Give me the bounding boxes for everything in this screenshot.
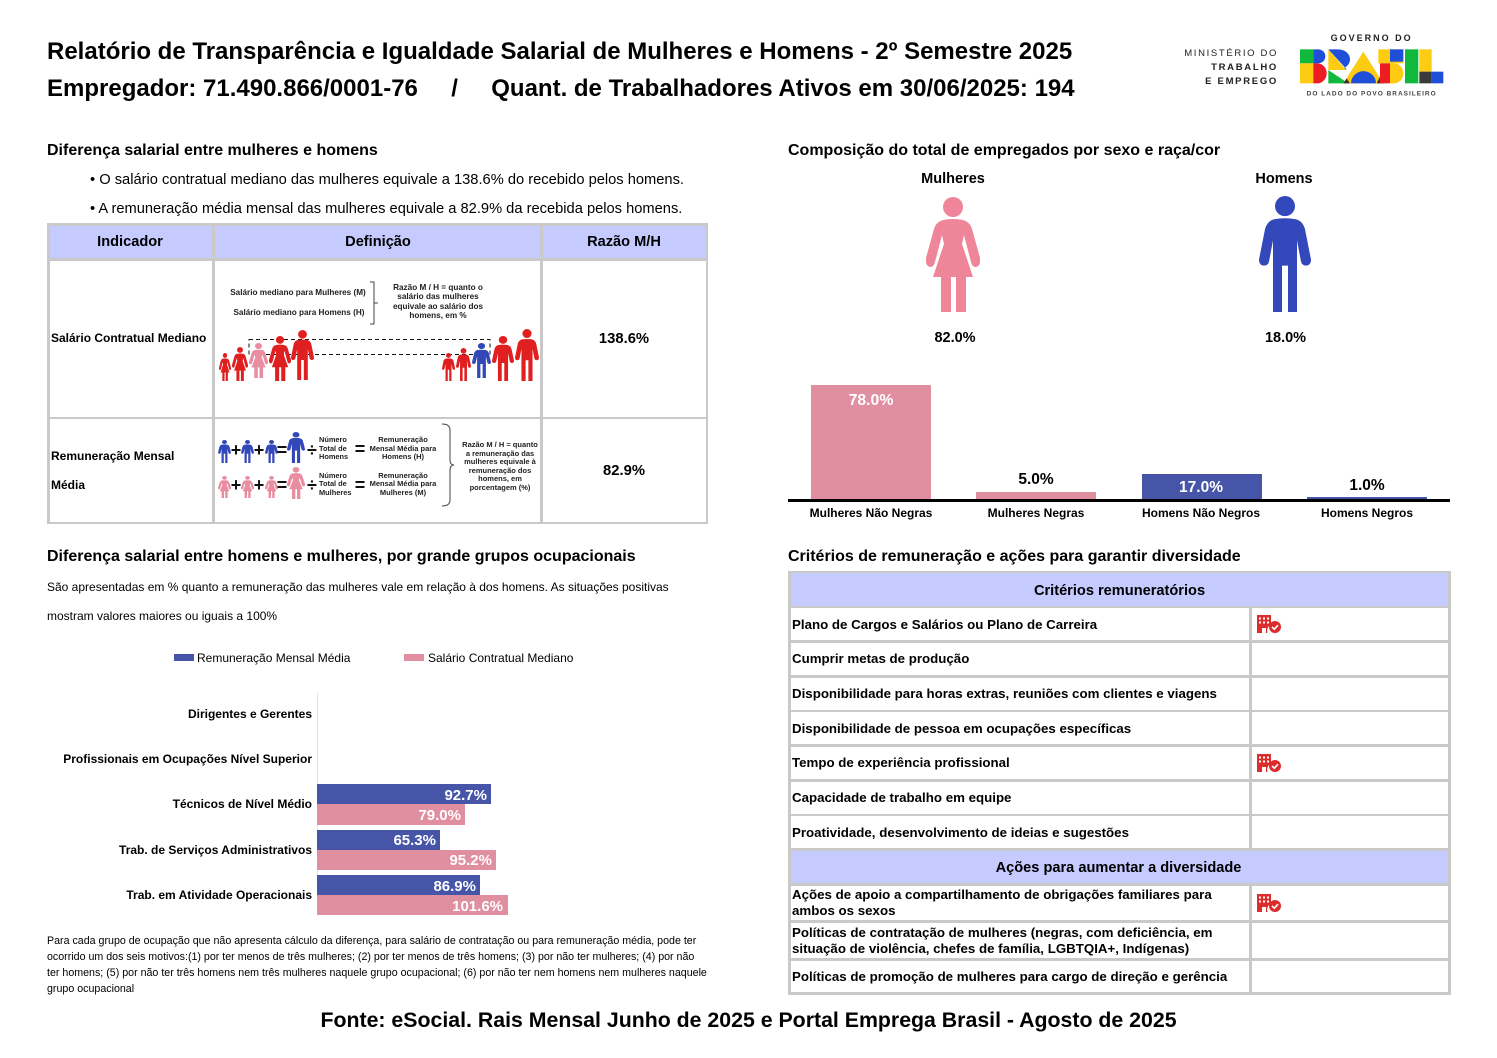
action: apoio line 1: Ações de apoio a compartilhamento de obrigações familiares para xyxy=(792,887,1212,902)
heading: composição: Composição do total de empregados por sexo e raça/cor xyxy=(788,142,1220,159)
heading: diferença salarial: Diferença salarial entre mulheres e homens xyxy=(47,142,378,159)
footnote xyxy=(47,935,707,995)
category: técnicos: Técnicos de Nível Médio xyxy=(173,797,312,811)
definition diagram: remuneração média: mulheres equivale à xyxy=(464,457,537,466)
source footer: Fonte: eSocial. Rais Mensal Junho de 2025 e Portal Emprega Brasil - Agosto de 2025 xyxy=(320,1008,1177,1032)
definition diagram: remuneração média: Mensal Média para xyxy=(370,479,437,488)
bar: serviços salário: 95.2% xyxy=(449,852,492,869)
action: promoção: Políticas de promoção de mulheres para cargo de direção e gerência xyxy=(792,968,1227,984)
definition diagram: remuneração média: = xyxy=(277,440,287,460)
legend text: salário: Salário Contratual Mediano xyxy=(428,651,573,665)
legend swatch: pink xyxy=(404,654,424,661)
bar: serviços remuneração: 65.3% xyxy=(393,832,436,849)
definition diagram: remuneração média: Homens xyxy=(319,452,348,461)
icon: building check xyxy=(1257,894,1281,912)
axis label 4: Homens Negros xyxy=(1321,506,1413,520)
title: Relatório de Transparência e Igualdade Salarial de Mulheres e Homens - 2º Semestre 2025 xyxy=(47,38,1072,65)
bar: operacionais salário: 101.6% xyxy=(452,898,503,915)
column: mulheres não negras xyxy=(811,385,931,500)
criterion: experiência: Tempo de experiência profissional xyxy=(792,754,1010,770)
bar: técnicos remuneração: 92.7% xyxy=(444,787,487,804)
value: 17.0%: 17.0% xyxy=(1179,479,1223,496)
legend swatch: blue xyxy=(174,654,194,661)
footnote: Para cada grupo de ocupação que não apresenta cálculo da diferença, para salário de contratação ou para remuneração média, pode ter xyxy=(47,935,696,947)
definition diagram: remuneração média: Total de xyxy=(319,479,347,488)
header: razão: Razão M/H xyxy=(587,234,661,250)
legend text: remuneração: Remuneração Mensal Média xyxy=(197,651,350,665)
bullet: remuneração média: • A remuneração média mensal das mulheres equivale a 82.9% da recebida pelos homens. xyxy=(90,201,682,217)
definition diagram: remuneração média: = xyxy=(277,475,287,495)
definition diagram: remuneração média: + xyxy=(231,440,241,460)
definition diagram: remuneração média: Mulheres xyxy=(319,488,351,497)
footnote: grupo ocupacional xyxy=(47,983,134,995)
definition diagram: salário mediano: equivale ao salário dos xyxy=(393,302,483,311)
category: serviços: Trab. de Serviços Administrativos xyxy=(119,843,312,857)
definition diagram: remuneração média: Remuneração xyxy=(378,435,428,444)
axis label 2: Mulheres Negras xyxy=(988,506,1084,520)
definition diagram: remuneração média: remuneração dos xyxy=(469,466,531,475)
bar: operacionais salário xyxy=(317,895,508,915)
legend xyxy=(174,651,573,665)
value: 18.0%: 18.0% xyxy=(1265,330,1306,346)
definition diagram: remuneração média: ÷ xyxy=(307,440,317,460)
definition diagram: remuneração média: Mulheres (M) xyxy=(380,488,427,497)
header: ações: Ações para aumentar a diversidade xyxy=(996,860,1241,876)
icon: woman xyxy=(926,197,980,312)
logo: ministério: TRABALHO xyxy=(1211,62,1278,73)
definition diagram: remuneração média: Homens (H) xyxy=(382,452,425,461)
bar: técnicos salário: 79.0% xyxy=(418,807,461,824)
column chart xyxy=(788,385,1450,520)
axis xyxy=(788,499,1450,502)
definition diagram: remuneração média: a remuneração das xyxy=(466,449,534,458)
action: contratação line 2: situação de violência, chefes de família, LGBTQIA+, Indígenas) xyxy=(792,940,1189,956)
definition diagram: remuneração média: homens, em xyxy=(478,474,522,483)
action: apoio line 2: ambos os sexos xyxy=(792,903,895,918)
bar chart xyxy=(63,693,508,915)
note line 2: mostram valores maiores ou iguais a 100% xyxy=(47,608,277,622)
definition diagram: remuneração média: = xyxy=(355,439,365,459)
category: dirigentes: Dirigentes e Gerentes xyxy=(188,707,312,721)
criterion: horas extras: Disponibilidade para horas extras, reuniões com clientes e viagens xyxy=(792,686,1217,700)
column: mulheres negras xyxy=(976,492,1096,500)
definition diagram: remuneração média: + xyxy=(254,440,264,460)
definition diagram: remuneração média: Total de xyxy=(319,444,347,453)
logo: governo do brasil: DO LADO DO POVO BRASILEIRO xyxy=(1307,90,1437,97)
header: critérios remuneratórios: Critérios remuneratórios xyxy=(1034,583,1205,599)
row label: média: Média xyxy=(51,478,85,492)
heading: grupos ocupacionais: Diferença salarial entre homens e mulheres, por grande grupos ocupacionais xyxy=(47,548,636,565)
definition diagram: remuneração média: Mensal Média para xyxy=(370,444,437,453)
criterion: ocupações específicas: Disponibilidade de pessoa em ocupações específicas xyxy=(792,720,1131,736)
definition diagram: remuneração média: Remuneração xyxy=(378,471,428,480)
value: 1.0%: 1.0% xyxy=(1349,477,1385,494)
bar: serviços remuneração xyxy=(317,830,440,850)
bar: técnicos salário xyxy=(317,804,465,825)
column: homens negros xyxy=(1307,497,1427,500)
category: profissionais: Profissionais em Ocupações Nível Superior xyxy=(63,752,312,766)
axis label 1: Mulheres Não Negras xyxy=(810,506,932,520)
logo: ministério: E EMPREGO xyxy=(1205,76,1278,87)
bar: operacionais remuneração xyxy=(317,875,480,895)
definition diagram: remuneração média: Número xyxy=(319,471,347,480)
definition diagram: salário mediano: Salário mediano para Homens (H) xyxy=(233,308,365,317)
column: homens não negros xyxy=(1142,474,1262,500)
logo: ministério xyxy=(1184,48,1278,87)
criterion: proatividade: Proatividade, desenvolvimento de ideias e sugestões xyxy=(792,824,1129,840)
label: mulheres: Mulheres xyxy=(921,171,985,187)
bar: técnicos remuneração xyxy=(317,784,491,804)
logo: governo do brasil xyxy=(1300,33,1444,97)
value: 82.0%: 82.0% xyxy=(934,330,976,346)
footnote: ter homens; (5) por não ter três homens nem três mulheres naquele grupo ocupacional; (6) por não ter nem homens nem mulheres naquele xyxy=(47,967,707,979)
logo: ministério: MINISTÉRIO DO xyxy=(1184,48,1278,59)
definition diagram: salário mediano: Salário mediano para Mulheres (M) xyxy=(230,288,366,297)
panel: indicator table xyxy=(47,223,708,524)
criterion: equipe: Capacidade de trabalho em equipe xyxy=(792,790,1011,804)
axis label 3: Homens Não Negros xyxy=(1142,506,1260,520)
definition diagram: remuneração média: ÷ xyxy=(307,475,317,495)
definition diagram: remuneração média xyxy=(218,424,538,506)
definition diagram: salário mediano: salário das mulheres xyxy=(397,292,479,301)
definition diagram: remuneração média: Razão M / H = quanto xyxy=(462,440,538,449)
bullet: salário contratual: • O salário contratual mediano das mulheres equivale a 138.6% do recebido pelos homens. xyxy=(90,172,684,188)
criterion: plano de cargos: Plano de Cargos e Salários ou Plano de Carreira xyxy=(792,616,1097,632)
definition diagram: salário mediano: homens, em % xyxy=(409,311,467,320)
definition diagram: remuneração média: Número xyxy=(319,435,347,444)
bar: operacionais remuneração: 86.9% xyxy=(433,878,476,895)
logo: governo do brasil: GOVERNO DO xyxy=(1331,33,1413,43)
value: 78.0%: 78.0% xyxy=(849,392,893,408)
definition diagram: remuneração média: porcentagem (%) xyxy=(470,483,531,492)
definition diagram: remuneração média: + xyxy=(231,475,241,495)
action: contratação line 1: Políticas de contratação de mulheres (negras, com deficiência, em xyxy=(792,924,1212,940)
row label: salário contratual: Salário Contratual Mediano xyxy=(51,331,206,345)
category: operacionais: Trab. em Atividade Operacionais xyxy=(126,888,312,902)
row label: remuneração: Remuneração Mensal xyxy=(51,449,174,463)
bar: serviços salário xyxy=(317,850,496,870)
header: definição: Definição xyxy=(345,234,411,250)
definition diagram: salário mediano: Razão M / H = quanto o xyxy=(393,283,483,292)
row value: 82.9%: 82.9% xyxy=(603,463,645,479)
footnote: ocorrido um dos seis motivos:(1) por ter menos de três mulheres; (2) por ter menos de três homens; (3) por não ter mulheres; (4) por não xyxy=(47,951,694,963)
criterion: metas: Cumprir metas de produção xyxy=(792,650,969,666)
label: homens: Homens xyxy=(1255,171,1313,187)
icon: building check xyxy=(1257,615,1281,633)
definition diagram: remuneração média: = xyxy=(355,475,365,495)
value: 5.0%: 5.0% xyxy=(1018,471,1054,488)
definition diagram: salário mediano xyxy=(219,282,539,381)
row value: 138.6%: 138.6% xyxy=(599,331,649,347)
employer subtitle: Empregador: 71.490.866/0001-76 / Quant. de Trabalhadores Ativos em 30/06/2025: 194 xyxy=(47,75,1075,102)
header: indicador: Indicador xyxy=(97,234,163,250)
heading: critérios: Critérios de remuneração e ações para garantir diversidade xyxy=(788,548,1241,565)
icon: building check xyxy=(1257,754,1281,772)
note line 1: São apresentadas em % quanto a remuneração das mulheres vale em relação à dos homens. As situações positivas xyxy=(47,580,669,594)
definition diagram: remuneração média: + xyxy=(254,475,264,495)
icon: man xyxy=(1259,196,1311,312)
